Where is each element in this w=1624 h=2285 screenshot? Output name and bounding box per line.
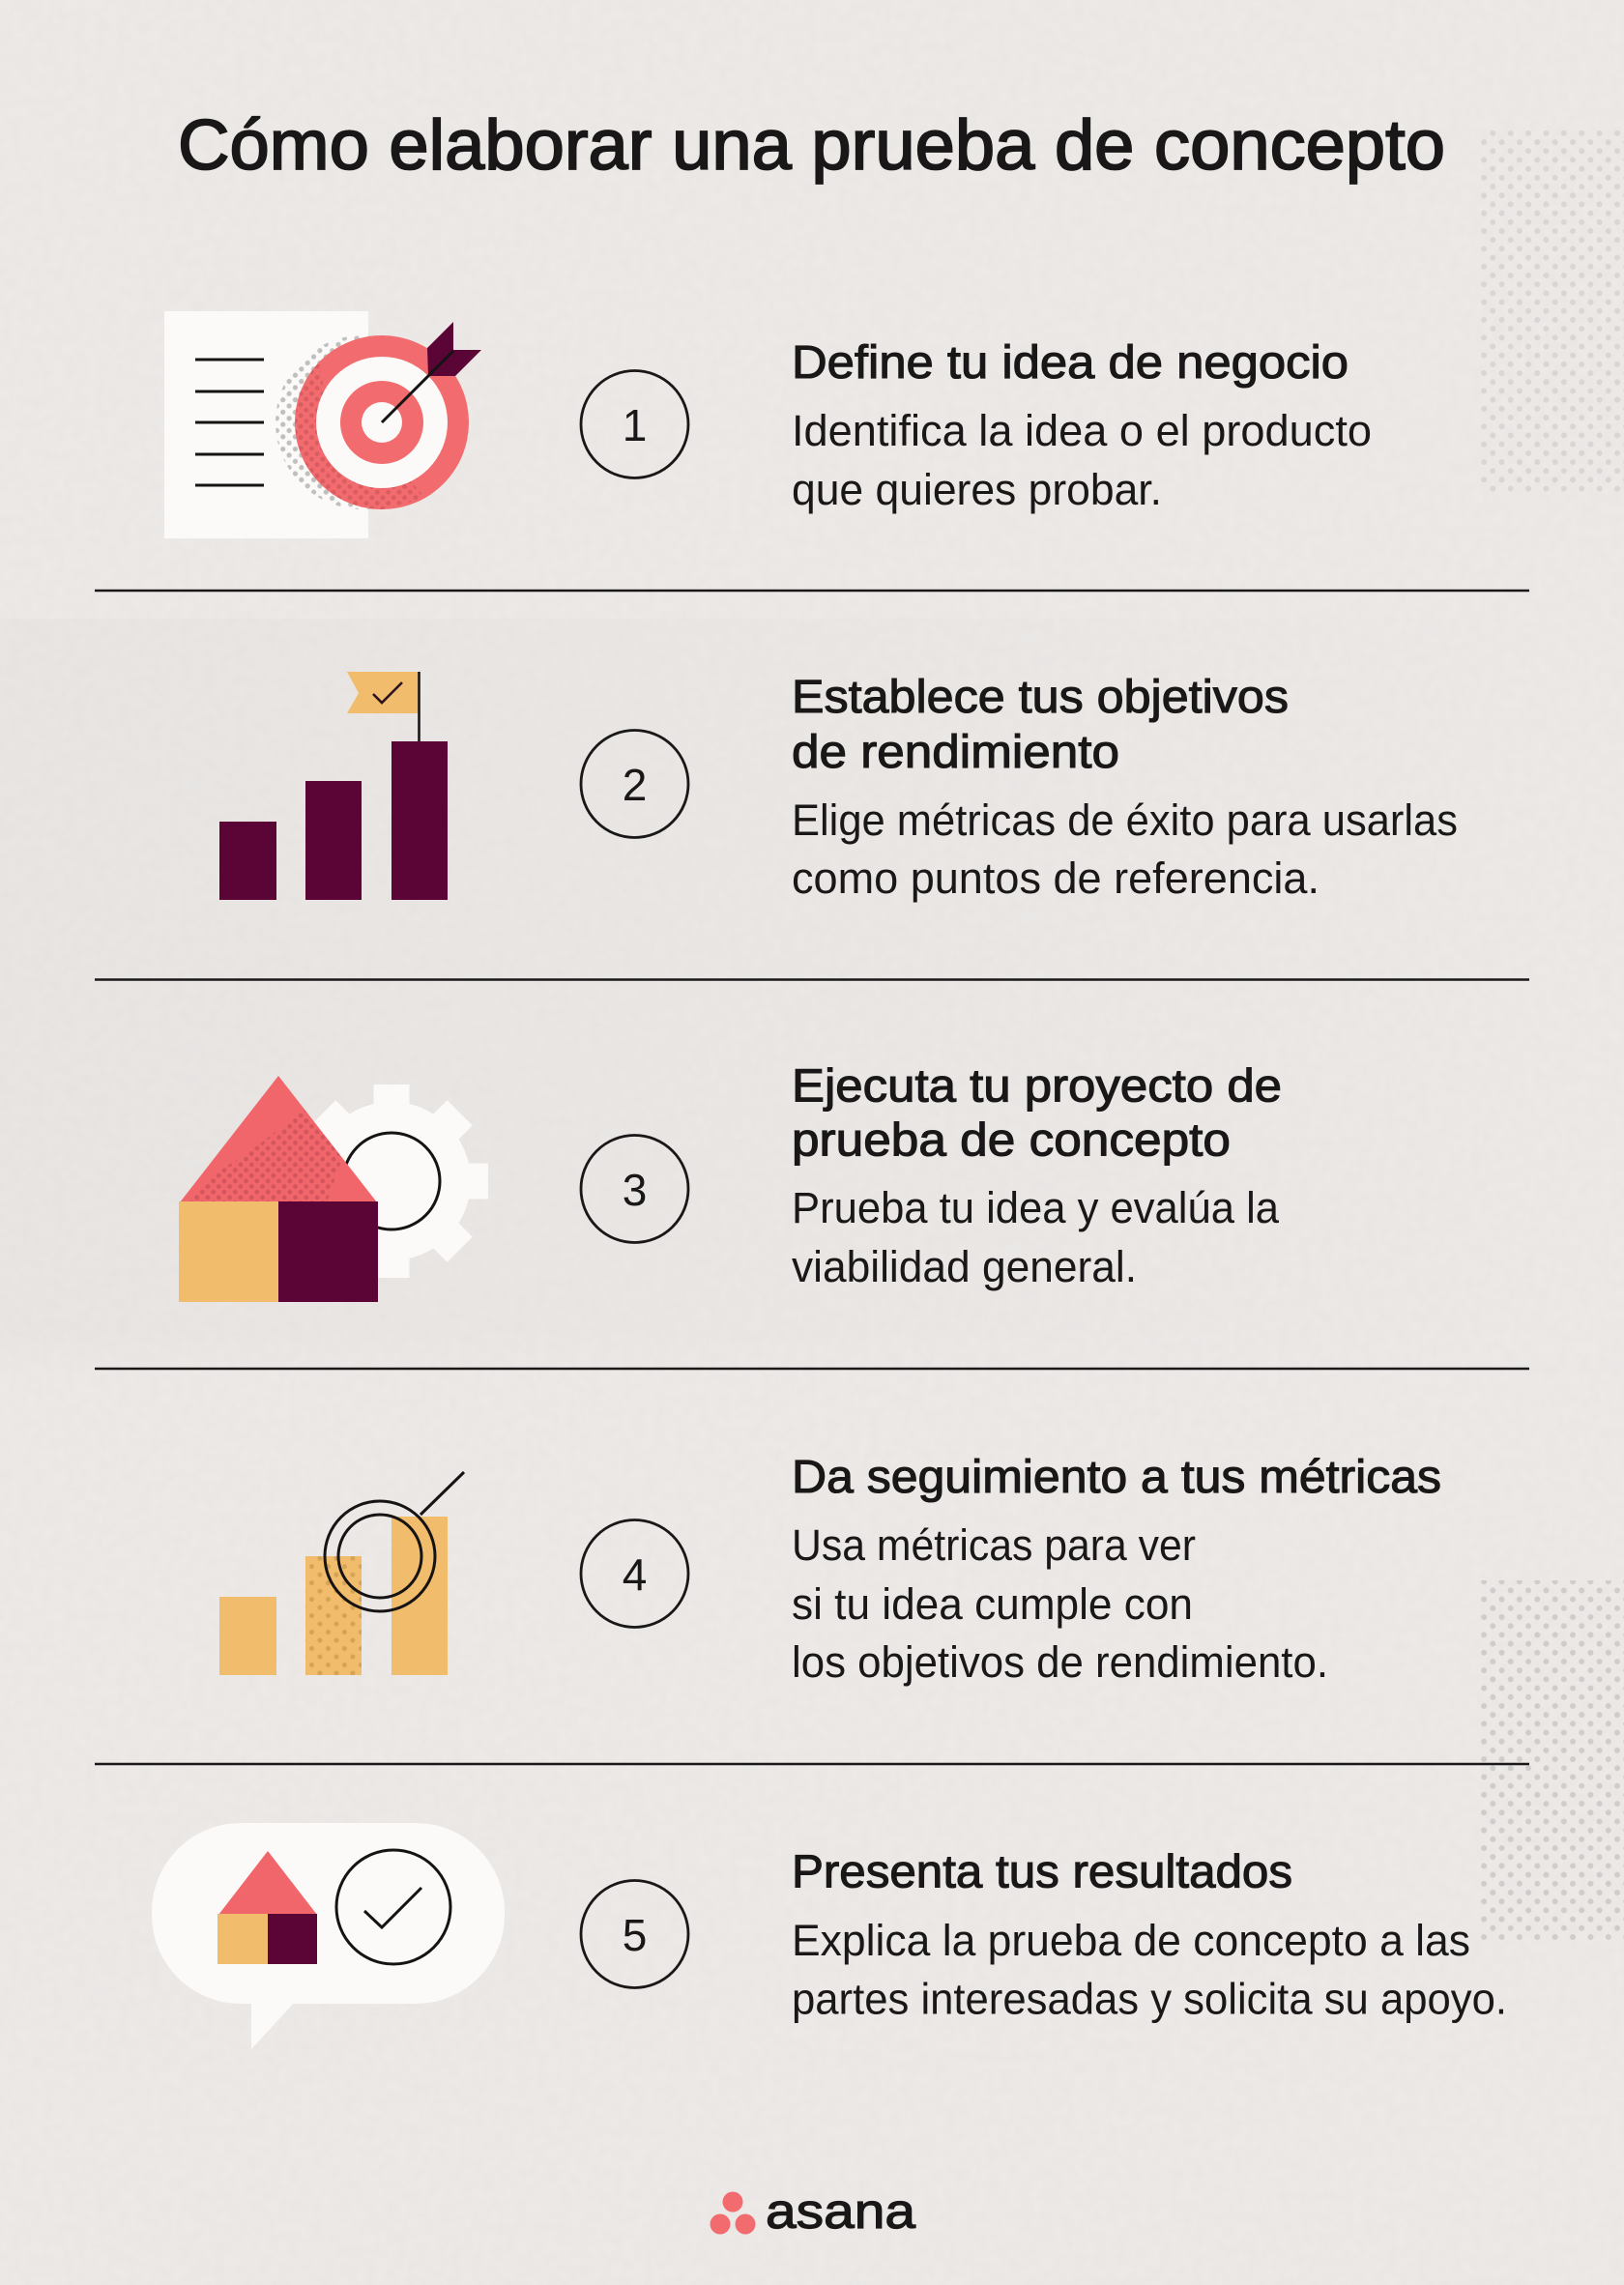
step 2 text: de rendimiento [792, 727, 1119, 778]
step number 2 [581, 731, 688, 837]
target rings [295, 335, 469, 509]
step number 3 [581, 1135, 688, 1243]
panel: step 3 [179, 1061, 1282, 1302]
logo dots [710, 2192, 756, 2235]
step 5 text: partes interesadas y solicita su apoyo. [792, 1974, 1507, 2024]
bars [219, 741, 448, 900]
flag [347, 672, 420, 742]
step 4 text: si tu idea cumple con [792, 1579, 1193, 1629]
step 3 text: Ejecuta tu proyecto de [792, 1061, 1282, 1112]
step 5 text: Explica la prueba de concepto a las [792, 1916, 1470, 1965]
panel: step 5 [152, 1823, 1507, 2049]
step number 1: 1 [623, 400, 647, 450]
icon: house and gear [179, 1076, 488, 1302]
magnifier [325, 1472, 464, 1611]
step number 4: 4 [623, 1549, 647, 1600]
icon: speech bubble with house and check [152, 1823, 505, 2049]
document text lines [195, 360, 264, 485]
icon: bars with magnifier [219, 1472, 464, 1675]
icon: document and target [164, 311, 481, 538]
step 3 text: Prueba tu idea y evalúa la [792, 1183, 1280, 1232]
step 3 text: prueba de concepto [792, 1115, 1231, 1166]
target shadow [276, 335, 450, 509]
step 5 text [792, 1846, 1507, 2024]
panel: step 2 [219, 672, 1458, 903]
step 3 text: viabilidad general. [792, 1242, 1137, 1291]
step 1 text: Define tu idea de negocio [792, 337, 1348, 389]
step 3 text [792, 1061, 1282, 1291]
step number 1 [581, 371, 688, 477]
house [179, 1076, 378, 1302]
step number 2: 2 [623, 760, 647, 810]
step number 4 [581, 1519, 688, 1628]
small house [218, 1851, 317, 1964]
check circle [336, 1850, 450, 1964]
step 4 text [792, 1452, 1441, 1687]
logo: asana [710, 2184, 916, 2239]
gear [295, 1085, 488, 1278]
logo wordmark: asana [766, 2184, 916, 2239]
step 5 text: Presenta tus resultados [792, 1846, 1292, 1898]
step 1 text [792, 337, 1372, 514]
step 2 text [792, 672, 1458, 903]
step number 5: 5 [623, 1910, 647, 1960]
step 4 text: los objetivos de rendimiento. [792, 1637, 1328, 1687]
icon: bars with flag [219, 672, 448, 900]
step 4 text: Usa métricas para ver [792, 1520, 1196, 1570]
document sheet [164, 311, 368, 538]
step number 3: 3 [623, 1165, 647, 1215]
speech bubble [152, 1823, 505, 2049]
panel: step 1 [164, 311, 1372, 538]
step number 5 [581, 1881, 688, 1987]
step 2 text: como puntos de referencia. [792, 853, 1320, 903]
step 2 text: Establece tus objetivos [792, 672, 1289, 723]
bars [219, 1517, 448, 1675]
title: Cómo elaborar una prueba de concepto [178, 106, 1445, 185]
step 4 text: Da seguimiento a tus métricas [792, 1452, 1441, 1503]
step 1 text: que quieres probar. [792, 465, 1162, 514]
arrow [382, 322, 481, 422]
step 1 text: Identifica la idea o el producto [792, 406, 1372, 455]
panel: step 4 [219, 1452, 1441, 1687]
step 2 text: Elige métricas de éxito para usarlas [792, 795, 1458, 845]
